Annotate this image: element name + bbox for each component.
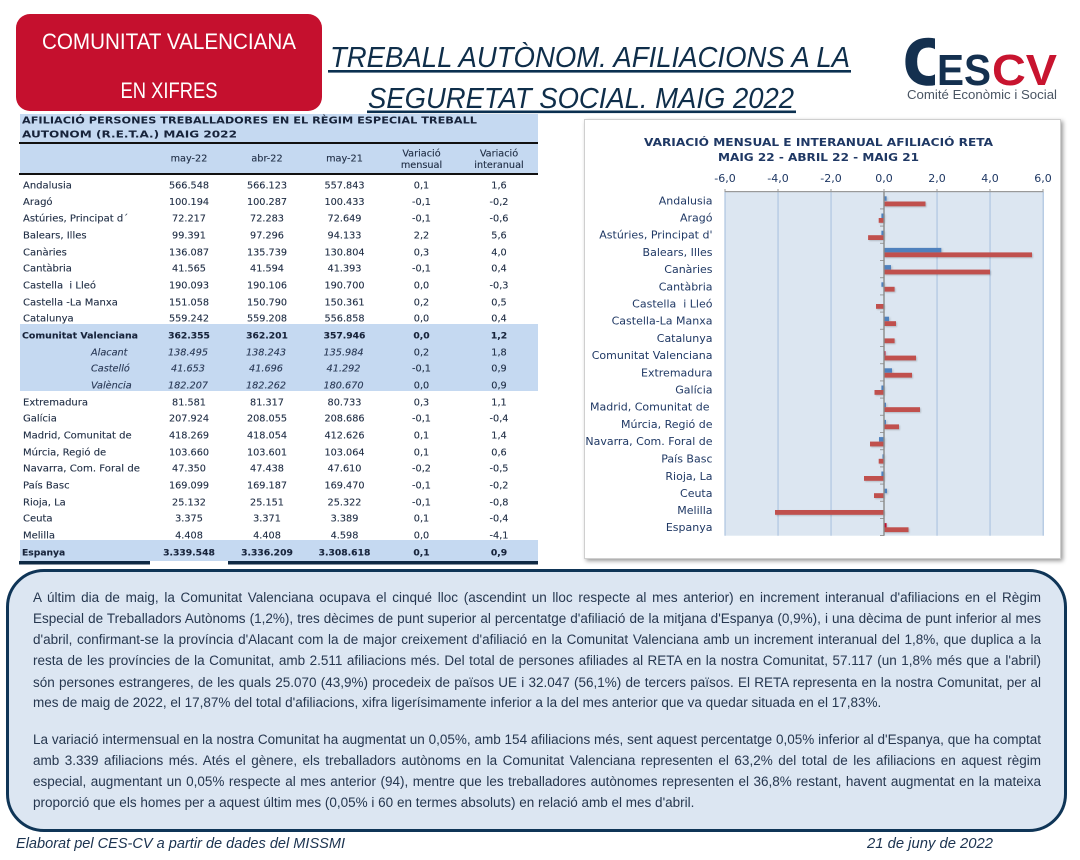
row: Cantàbria: 0,4 [491,264,507,274]
row: Galícia [23,412,508,424]
paragraph 2: especial, augmentant un 0,05% respecte al mes anterior (94), mentre que les treballadores autònomes representen el 36,8% restant, havent augmentat en la mateixa [33,774,1041,789]
row: Rioja: Rioja, La [23,498,66,508]
category labels: Galícia [675,384,712,396]
row: Cantàbria: 41.594 [250,264,284,274]
row: Balears: 94.133 [328,230,361,242]
highlighted block: Comunitat Valenciana: 138.495 [168,348,208,358]
row: Madrid [23,430,507,442]
row: País Basc: 169.099 [169,480,209,492]
row: Múrcia: 103.660 [169,448,209,458]
x axis labels: 2,0 [928,172,946,185]
table column headers: abr-22 [251,154,283,164]
table heading: AUTONOM (R.E.T.A.) MAIG 2022 [22,130,237,140]
row: Castella-La Manxa: 0,5 [491,298,507,308]
row: Navarra: 47.610 [328,464,361,474]
row: Extremadura: 1,1 [491,398,507,408]
row: Melilla: 0,0 [414,530,429,542]
row: Balears: 5,6 [491,230,507,242]
paragraph 1: d'abril, confirmant-se la província d'Alacant com la de major creixement d'afiliació en la Comunitat Valenciana amb un increment interanual del 1,8%, que duplica a la [33,632,1041,647]
x axis labels: 4,0 [981,172,999,185]
row: Espanya [19,540,538,564]
table column headers: Variació [480,148,518,160]
row: Balears: Balears, Illes [23,230,87,242]
date: 21 de juny de 2022 [866,836,993,852]
row: Canàries [23,246,507,258]
highlighted block: Comunitat Valenciana: 362.201 [246,330,288,342]
vertical zero axis [883,192,885,536]
row: Múrcia: 103.601 [247,448,287,458]
row: Aragó: 100.433 [324,197,365,208]
row: Espanya: 0,1 [413,548,430,558]
logo: CES CV: C [904,26,950,98]
highlighted block: Comunitat Valenciana: 1,8 [491,348,507,358]
row: Aragó: -0,2 [490,197,508,208]
row: Catalunya: 559.242 [169,314,209,324]
row: Melilla: 4.408 [175,530,203,542]
row: Catalunya: 556.858 [324,314,365,324]
row: Extremadura: 81.317 [250,398,284,408]
row: Espanya: 3.339.548 [163,548,215,558]
row: Ceuta: -0,4 [490,514,508,524]
category labels: Andalusia [659,194,712,208]
row: Aragó [23,196,508,208]
row: Galícia: 208.055 [247,414,287,424]
panel: bar chart of monthly and year-on-year variation [584,120,1060,558]
x axis labels: -4,0 [767,172,789,185]
highlighted block: Comunitat Valenciana: 41.653 [171,364,205,374]
row: Extremadura: 81.581 [172,398,206,408]
x axis labels [714,172,1052,185]
row: Canàries: 130.804 [324,248,365,258]
row: País Basc: 169.470 [324,480,365,492]
paragraph 2: amb 3.339 afiliacions més. Atés el gènere, els treballadors autònoms en la Comunitat Valenciana representen el 63,2% del total de les afiliacions en aquest règim [33,753,1041,768]
row: País Basc [23,480,508,492]
row: Castella i Lleó: 0,0 [414,280,429,292]
logo: CES CV: CV [992,46,1058,95]
category labels: Ceuta [680,487,712,500]
table column headers: interanual [474,160,524,171]
row: País Basc: País Basc [23,480,70,492]
row: Canàries: 4,0 [491,248,507,258]
row: Rioja: 25.151 [250,498,284,508]
row: Astúries [23,212,508,224]
row: Astúries: 72.649 [328,214,361,224]
chart title: VARIACIÓ MENSUAL E INTERANUAL AFILIACIÓ RETA [644,136,994,149]
row: Aragó: 100.194 [169,197,209,208]
row: Aragó: -0,1 [412,197,431,208]
row: Rioja: -0,8 [490,498,508,508]
row: Catalunya: 0,0 [414,314,429,324]
row: Rioja: 25.132 [172,498,206,508]
row: Galícia: 208.686 [324,414,365,424]
row: Melilla: Melilla [23,530,55,542]
row: Madrid: 418.054 [247,430,287,442]
row: Navarra: 47.350 [172,464,206,474]
row: Rioja: -0,1 [412,498,431,508]
row: Andalusia [23,180,507,192]
title: TREBALL AUTÒNOM. AFILIACIONS A LA [330,41,850,74]
highlighted block: Comunitat Valenciana: 138.243 [246,348,286,358]
row: Castella-La Manxa [23,298,507,308]
row: Madrid: 412.626 [324,430,365,442]
row: Balears [23,230,507,242]
highlighted block: Comunitat Valenciana: Comunitat Valenciana [22,330,138,342]
row: Castella-La Manxa: 0,2 [414,298,429,308]
row: Balears: 2,2 [414,230,429,242]
row: Espanya: 3.308.618 [319,548,370,558]
row: Cantàbria: 41.393 [328,264,361,274]
row: Extremadura: 80.733 [328,398,361,408]
row: Cantàbria: 41.565 [172,264,206,274]
highlighted block: Comunitat Valenciana: 0,0 [414,380,429,392]
badge: Comunitat Valenciana en xifres [16,14,322,111]
row: Ceuta: 0,1 [414,514,429,524]
row: Melilla [23,530,508,542]
row: Astúries: 72.217 [172,214,206,224]
highlighted block: Comunitat Valenciana: 0,2 [414,348,429,358]
plot area [724,189,1044,536]
paragraph 2: proporció que els homes per a aquest últim mes (0,05% i 60 en termes absoluts) en relació amb el mes d'abril. [33,795,694,810]
x axis labels: 0,0 [875,172,893,185]
row: Espanya: Espanya [22,548,65,558]
row: Canàries: 0,3 [414,248,429,258]
highlighted block: Comunitat Valenciana: 0,9 [491,364,507,374]
row: Ceuta [23,514,508,524]
category labels: Melilla [677,504,712,517]
row: Andalusia: 557.843 [324,180,365,192]
row: Madrid: Madrid, Comunitat de [23,430,132,442]
row: Navarra: Navarra, Com. Foral de [23,464,140,474]
category labels: Castella-La Manxa [612,315,712,328]
row: Galícia: 207.924 [169,414,209,424]
paragraph 2 [33,732,1041,810]
row: Catalunya [23,314,507,324]
row: Andalusia: 566.123 [247,180,287,192]
highlighted block: Comunitat Valenciana: 0,0 [413,330,430,342]
category labels: Madrid, Comunitat de [590,401,710,414]
row: Aragó: Aragó [23,196,53,208]
row: Melilla: -4,1 [490,530,508,542]
row: Cantàbria [23,262,507,274]
source note: Elaborat pel CES-CV a partir de dades del MISSMI [16,836,345,852]
table column headers: Variació [402,148,441,160]
category labels: País Basc [661,452,712,465]
row: Navarra: -0,5 [490,464,508,474]
row: Extremadura [23,398,507,408]
row: Catalunya: 559.208 [247,314,287,324]
chart title [644,136,994,164]
highlighted block: Comunitat Valenciana: 180.670 [323,380,364,392]
row: Madrid: 0,1 [414,430,429,442]
row: Andalusia: 1,6 [491,180,507,192]
row: Astúries: Astúries, Principat d´ [23,212,128,224]
table: afiliació RETA [19,114,538,564]
row: Madrid: 418.269 [169,430,209,442]
row: Múrcia: 103.064 [324,448,365,458]
category labels: Navarra, Com. Foral de [585,435,713,448]
row: Castella i Lleó: Castella i Lleó [23,280,96,292]
highlighted block: Comunitat Valenciana: 1,2 [491,330,507,342]
panel: commentary text [6,569,1067,832]
table column headers: mensual [401,160,442,171]
row: Castella i Lleó: 190.093 [169,280,209,292]
row: Múrcia: 0,1 [414,448,429,458]
row: Castella-La Manxa: 151.058 [169,298,209,308]
badge: Comunitat Valenciana en xifres: EN XIFRES [120,78,218,103]
row: Cantàbria: Cantàbria [23,262,72,274]
paragraph 1: resta de les províncies de la Comunitat, amb 2.511 afiliacions més. Del total de persones afiliades al RETA en la nostra Comunitat, 57.117 (un 1,8% més que a l'abril) [33,653,1041,668]
logo: CES CV: Comité Econòmic i Social [907,87,1057,102]
highlighted block: Comunitat Valenciana: 182.262 [246,380,286,392]
row: Andalusia: Andalusia [23,180,72,192]
category labels: Rioja, La [665,470,712,483]
row: Ceuta: Ceuta [23,514,53,524]
row: País Basc: -0,1 [412,480,431,492]
row: Múrcia: 0,6 [491,448,507,458]
x axis labels: 6,0 [1034,172,1052,185]
table column headers [19,142,538,175]
category labels [585,194,713,534]
row: Espanya: 3.336.209 [241,548,293,558]
row: Navarra [23,464,508,474]
row: Castella i Lleó: 190.106 [247,280,287,292]
x axis labels: -2,0 [820,172,842,185]
x axis labels: -6,0 [714,172,736,185]
series: variació mensual [879,196,941,528]
row: Astúries: -0,6 [490,214,508,224]
row: Rioja: 25.322 [328,498,361,508]
highlighted block: Comunitat Valenciana: 41.696 [249,364,283,374]
highlighted block: Comunitat Valenciana: València [91,380,132,392]
highlighted block: Comunitat Valenciana [20,324,538,392]
row: Galícia: -0,4 [490,414,508,424]
highlighted block: Comunitat Valenciana: Castelló [91,362,130,374]
badge: Comunitat Valenciana en xifres: COMUNITAT VALENCIANA [42,29,296,54]
highlighted block: Comunitat Valenciana: -0,1 [412,364,431,374]
row: Múrcia [23,446,507,458]
series: variació interanual [775,202,1032,532]
row: Rioja [23,498,508,508]
highlighted block: Comunitat Valenciana: 182.207 [168,380,209,392]
row: Castella-La Manxa: Castella -La Manxa [23,298,118,308]
highlighted block: Comunitat Valenciana: 0,9 [491,380,507,392]
paragraph 1: Especial de Treballadors Autònoms (1,2%), tres dècimes de punt superior al percentatge d'afiliació de la mitjana d'Espanya (0,9%), i una dècima de punt inferior al mes [33,611,1041,626]
table column headers: may-22 [171,154,207,164]
row: Andalusia: 0,1 [414,180,429,192]
row: Extremadura: 0,3 [414,398,429,408]
category labels: Catalunya [657,332,712,345]
category labels: Astúries, Principat d' [599,229,712,242]
table heading: AFILIACIÓ PERSONES TREBALLADORES EN EL RÈGIM ESPECIAL TREBALL [22,114,478,126]
row: Madrid: 1,4 [491,430,507,442]
highlighted block: Comunitat Valenciana: 41.292 [327,364,360,374]
row: Melilla: 4.408 [253,530,281,542]
row: Espanya: 0,9 [491,548,507,558]
row: Ceuta: 3.371 [253,514,281,524]
highlighted block: Comunitat Valenciana: 362.355 [168,330,210,342]
row: Balears: 99.391 [172,230,206,242]
row: Cantàbria: -0,1 [412,264,431,274]
row: Canàries: 136.087 [169,248,209,258]
row: Castella i Lleó: -0,3 [490,280,508,292]
category labels: Extremadura [641,366,712,379]
highlighted block: Comunitat Valenciana: 135.984 [323,348,364,358]
row: Navarra: -0,2 [412,464,431,474]
row: Balears: 97.296 [250,230,284,242]
row: País Basc: 169.187 [247,480,287,492]
table column headers: may-21 [326,154,363,164]
category labels: Aragó [680,212,713,224]
row: Astúries: 72.283 [250,214,284,224]
row: Galícia: -0,1 [412,414,431,424]
title [328,41,851,115]
row: Andalusia: 566.548 [169,180,209,192]
row: Castella-La Manxa: 150.790 [247,298,287,308]
category labels: Balears, Illes [643,246,713,259]
category labels: Espanya [666,521,712,534]
category labels: Comunitat Valenciana [592,349,712,362]
category labels: Canàries [664,263,713,276]
row: Castella i Lleó: 190.700 [324,280,365,292]
category labels: Múrcia, Regió de [621,418,713,431]
logo: CES CV: ES [937,46,991,95]
category labels: Cantàbria [659,280,712,293]
chart title: MAIG 22 - ABRIL 22 - MAIG 21 [718,151,919,164]
table heading [20,114,538,143]
row: Extremadura: Extremadura [23,398,88,408]
row: Catalunya: Catalunya [23,314,74,324]
row: Ceuta: 3.375 [175,514,203,524]
row: Galícia: Galícia [23,412,57,424]
highlighted block: Comunitat Valenciana: 357.946 [324,330,365,342]
highlighted block: Comunitat Valenciana: Alacant [90,348,129,358]
row: Aragó: 100.287 [247,197,287,208]
paragraph 1 [33,590,1041,710]
title: SEGURETAT SOCIAL. MAIG 2022 [368,83,794,115]
paragraph 1: A últim dia de maig, la Comunitat Valenciana ocupava el cinqué lloc (ascendint un lloc respecte al mes anterior) en increment interanual d'afiliacions en el Règim [33,590,1041,605]
logo: CES CV [905,38,1057,99]
row: Múrcia: Múrcia, Regió de [23,446,106,458]
paragraph 2: La variació intermensual en la nostra Comunitat ha augmentat un 0,05%, amb 154 afiliacions més, sent aquest percentatge 0,05% inferior al d'Espanya, que ha comptat [33,732,1041,747]
row: Melilla: 4.598 [331,530,358,542]
row: Castella i Lleó [23,280,508,292]
row: Ceuta: 3.389 [331,514,358,524]
row: País Basc: -0,2 [490,480,508,492]
row: Navarra: 47.438 [250,464,284,474]
category labels: Castella i Lleó [632,298,713,310]
paragraph 1: són persones estrangeres, de les quals 25.070 (43,9%) procedeix de països UE i 32.047 (56,1%) de tercers països. El RETA representa en la nostra Comunitat, per al [33,675,1041,690]
row: Astúries: -0,1 [412,214,431,224]
paragraph 1: mes de maig de 2022, el 17,87% del total d'afiliacions, xifra ligerísimamente inferior a la del mes anterior que va quedar situada en el 17,83%. [33,695,881,710]
row: Canàries: 135.739 [247,248,287,258]
row: Castella-La Manxa: 150.361 [324,298,365,308]
row: Catalunya: 0,4 [491,314,507,324]
row: Canàries: Canàries [23,246,67,258]
